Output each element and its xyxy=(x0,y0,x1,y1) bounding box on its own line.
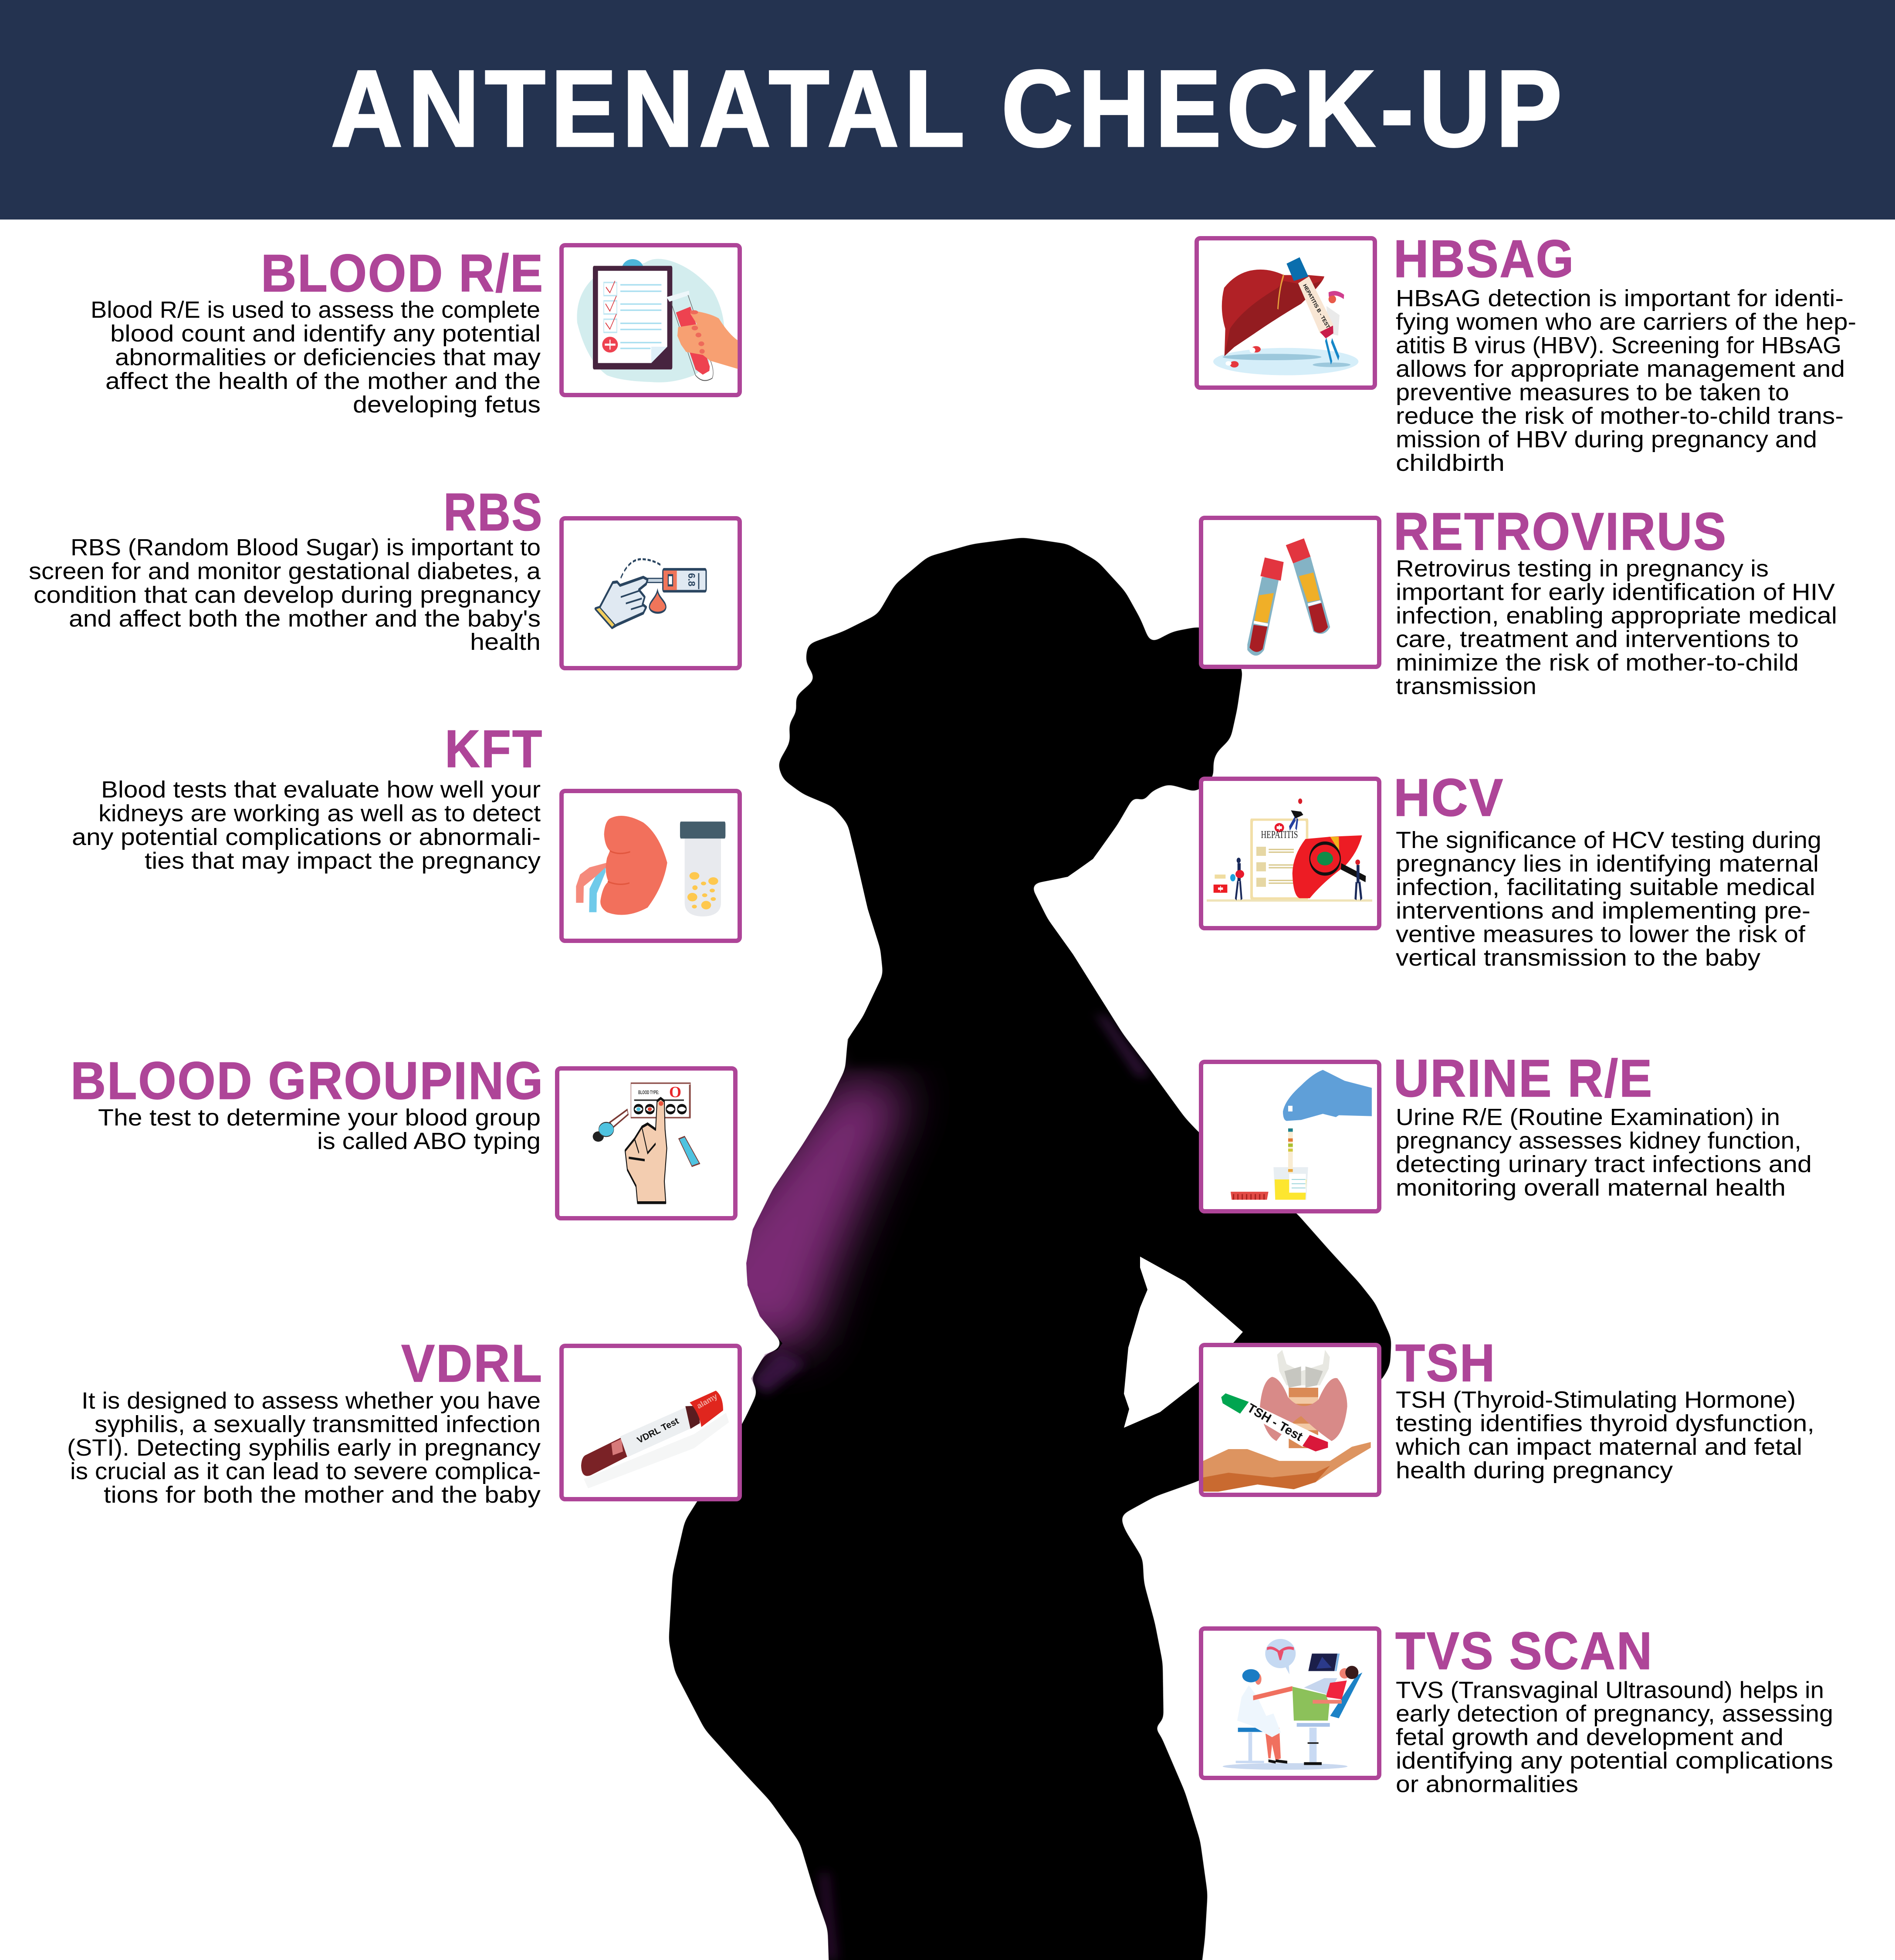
description: childbirth xyxy=(1396,450,1505,476)
heading: RETROVIRUS xyxy=(1394,502,1727,561)
description: monitoring overall maternal health xyxy=(1396,1175,1786,1201)
description: Retrovirus testing in pregnancy is xyxy=(1396,556,1769,582)
description: infection, facilitating suitable medical xyxy=(1396,874,1815,900)
icon: urine strip, beaker and glove xyxy=(1231,1070,1372,1200)
description: identifying any potential complications xyxy=(1396,1747,1833,1774)
panel: hbsag xyxy=(1197,229,1856,476)
description: reduce the risk of mother-to-child trans- xyxy=(1396,403,1844,429)
description xyxy=(1396,1104,1812,1201)
description xyxy=(1395,1387,1814,1484)
title: ANTENATAL CHECK-UP xyxy=(331,48,1567,169)
panel: retrovirus xyxy=(1201,502,1837,700)
icon: kidney and sample jar xyxy=(576,816,725,916)
description: testing identifies thyroid dysfunction, xyxy=(1396,1410,1814,1436)
description: atitis B virus (HBV). Screening for HBsAG xyxy=(1396,332,1841,358)
icon frame xyxy=(1201,779,1379,928)
description: health during pregnancy xyxy=(1396,1457,1673,1484)
panel: blood r/e xyxy=(91,243,740,418)
tube label: TSH - Test xyxy=(1245,1401,1305,1444)
description: important for early identification of HIV xyxy=(1396,579,1835,605)
description: preventive measures to be taken to xyxy=(1396,379,1789,406)
description: ties that may impact the pregnancy xyxy=(145,848,541,874)
description xyxy=(1396,285,1856,476)
description xyxy=(72,777,541,874)
heading: KFT xyxy=(445,719,543,778)
icon: clipboard and blood tube xyxy=(577,259,738,382)
report title: HEPATITIS xyxy=(1261,829,1298,841)
panel: tsh xyxy=(1201,1333,1814,1495)
description: tions for both the mother and the baby xyxy=(104,1482,541,1508)
description xyxy=(98,1105,541,1154)
icon: two blood tubes xyxy=(1247,538,1330,656)
description: HBsAG detection is important for identi- xyxy=(1396,285,1844,311)
description: infection, enabling appropriate medical xyxy=(1396,603,1837,629)
panel: kft xyxy=(72,719,740,941)
icon frame xyxy=(1197,238,1375,388)
heading: HCV xyxy=(1394,768,1504,827)
description: detecting urinary tract infections and xyxy=(1396,1151,1812,1177)
card text: BLOOD TYPE: xyxy=(638,1089,659,1095)
icon: gloved hand and glucose meter xyxy=(596,559,706,628)
icon frame xyxy=(1201,518,1379,667)
description: kidneys are working as well as to detect xyxy=(98,800,541,826)
heading: URINE R/E xyxy=(1394,1049,1653,1108)
icon: hepatitis report and liver xyxy=(1207,798,1372,900)
description: affect the health of the mother and the xyxy=(105,368,541,394)
description: syphilis, a sexually transmitted infection xyxy=(95,1411,541,1437)
description: interventions and implementing pre- xyxy=(1396,898,1810,924)
description xyxy=(1396,1677,1833,1798)
description: transmission xyxy=(1396,673,1536,700)
description: TSH (Thyroid-Stimulating Hormone) xyxy=(1396,1387,1796,1413)
tube label: VDRL Test xyxy=(636,1416,680,1446)
description: The significance of HCV testing during xyxy=(1396,827,1821,853)
description xyxy=(29,534,541,655)
description: RBS (Random Blood Sugar) is important to xyxy=(71,534,541,561)
description: pregnancy assesses kidney function, xyxy=(1396,1128,1801,1154)
description: abnormalities or deficiencies that may xyxy=(115,345,541,371)
description: pregnancy lies in identifying maternal xyxy=(1396,851,1819,877)
blood type letter: O xyxy=(669,1083,681,1101)
description: any potential complications or abnormali- xyxy=(72,824,541,850)
panel: rbs xyxy=(29,483,740,668)
watermark on cap: alamy xyxy=(695,1392,719,1410)
panel: blood grouping xyxy=(71,1051,735,1218)
icon frame xyxy=(562,518,740,668)
heading: TVS SCAN xyxy=(1395,1621,1653,1680)
description: condition that can develop during pregnancy xyxy=(34,582,541,608)
description: Blood tests that evaluate how well your xyxy=(101,777,541,803)
description: fying women who are carriers of the hep- xyxy=(1396,309,1856,335)
description: vertical transmission to the baby xyxy=(1396,945,1760,971)
description: ventive measures to lower the risk of xyxy=(1396,921,1806,947)
description: is crucial as it can lead to severe complica- xyxy=(70,1458,541,1484)
description xyxy=(1396,827,1821,971)
description: mission of HBV during pregnancy and xyxy=(1396,426,1817,453)
icon: vdrl blood tube xyxy=(581,1391,729,1488)
icon frame xyxy=(562,791,740,941)
description xyxy=(67,1388,541,1508)
panel: vdrl xyxy=(67,1334,740,1508)
meter reading: 6.8 xyxy=(686,573,697,586)
description: and affect both the mother and the baby's xyxy=(69,606,541,632)
icon frame xyxy=(557,1068,735,1218)
icon: finger prick and blood type card xyxy=(593,1083,700,1203)
panel: hcv xyxy=(1201,768,1821,971)
description: It is designed to assess whether you have xyxy=(81,1388,541,1414)
description: early detection of pregnancy, assessing xyxy=(1396,1700,1833,1727)
panel: urine r/e xyxy=(1201,1049,1812,1211)
description: or abnormalities xyxy=(1396,1771,1578,1798)
icon frame xyxy=(562,245,740,395)
icon frame xyxy=(1201,1345,1379,1495)
description: health xyxy=(470,629,541,655)
tube label: HEPATITIS B - TEST xyxy=(1302,283,1331,330)
heading: BLOOD GROUPING xyxy=(71,1051,544,1110)
heading: TSH xyxy=(1395,1333,1496,1392)
description: blood count and identify any potential xyxy=(110,321,541,347)
description: developing fetus xyxy=(353,392,541,418)
icon: ultrasound examination scene xyxy=(1223,1639,1362,1770)
icon frame xyxy=(1201,1629,1379,1778)
description: The test to determine your blood group xyxy=(98,1105,541,1131)
description xyxy=(1396,556,1837,700)
icon: liver and hepatitis tube xyxy=(1213,257,1358,375)
description xyxy=(91,297,541,418)
description: allows for appropriate management and xyxy=(1396,356,1845,382)
header band xyxy=(0,0,1895,220)
icon frame xyxy=(562,1346,740,1499)
icon: thyroid, tube and hand xyxy=(1203,1350,1371,1492)
heading: BLOOD R/E xyxy=(261,243,544,303)
description: Blood R/E is used to assess the complete xyxy=(91,297,540,323)
icon frame xyxy=(1201,1062,1379,1211)
heading: HBSAG xyxy=(1394,229,1575,288)
description: is called ABO typing xyxy=(317,1128,541,1154)
panel: tvs scan xyxy=(1201,1621,1833,1798)
heading: VDRL xyxy=(401,1334,543,1393)
description: TVS (Transvaginal Ultrasound) helps in xyxy=(1396,1677,1824,1703)
description: care, treatment and interventions to xyxy=(1396,626,1799,652)
description: fetal growth and development and xyxy=(1396,1724,1783,1750)
heading: RBS xyxy=(443,483,543,542)
description: screen for and monitor gestational diabetes, a xyxy=(29,558,541,585)
description: minimize the risk of mother-to-child xyxy=(1396,650,1799,676)
silhouette of pregnant woman xyxy=(669,537,1391,1960)
description: (STI). Detecting syphilis early in pregnancy xyxy=(67,1435,541,1461)
description: Urine R/E (Routine Examination) in xyxy=(1396,1104,1780,1130)
description: which can impact maternal and fetal xyxy=(1395,1434,1802,1460)
